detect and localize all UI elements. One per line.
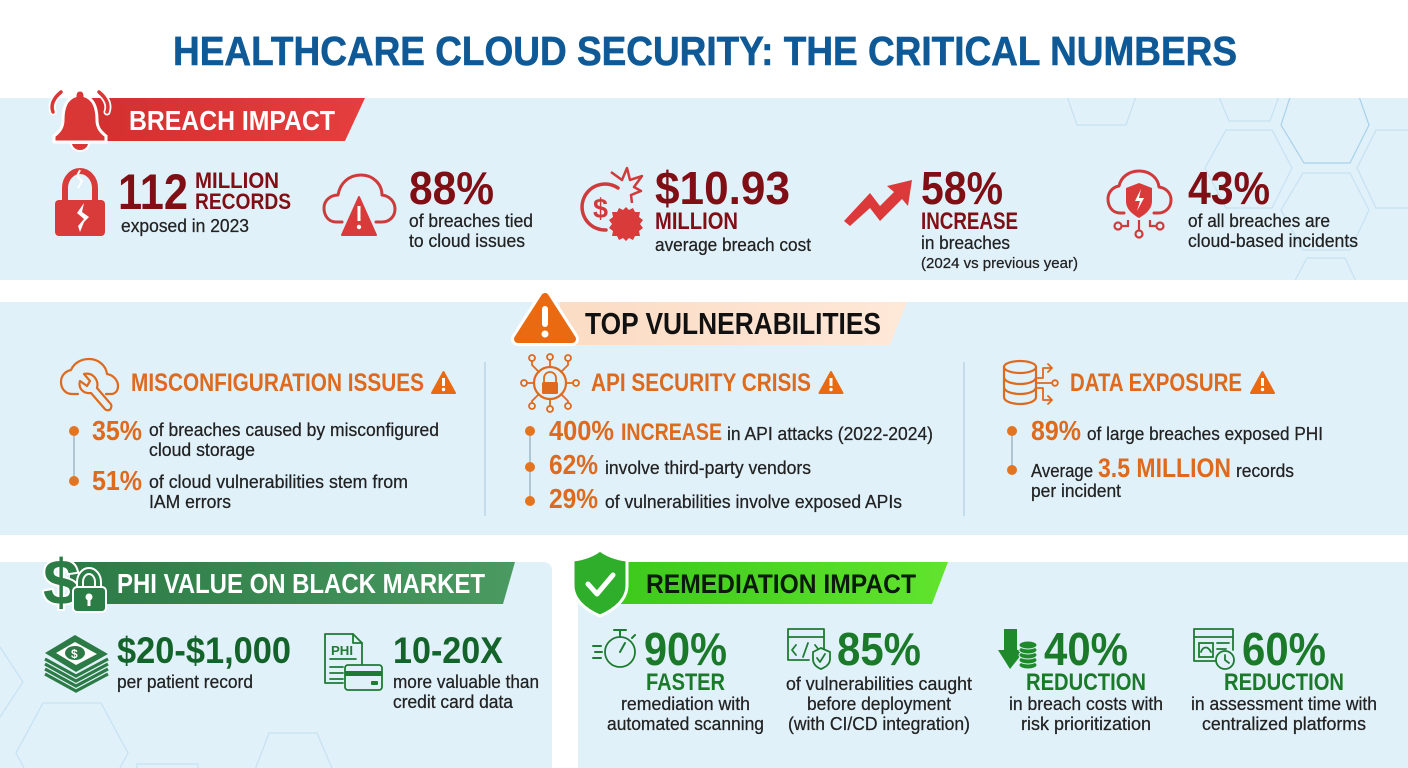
icon: PHI document and card: PHI: [331, 643, 353, 658]
stat: 60% reduction: REDUCTION: [1224, 669, 1344, 696]
column: data exposure: Average: [1031, 461, 1093, 481]
stat: 58% increase: (2024 vs previous year): [921, 255, 1078, 272]
panel: top vulnerabilities: [0, 297, 1408, 535]
stat: $10.93 million: MILLION: [655, 208, 738, 235]
stat: 58% increase: [844, 162, 1078, 272]
stat: 58% increase: INCREASE: [921, 208, 1018, 235]
banner: breach impact: BREACH IMPACT: [129, 105, 335, 136]
column: misconfiguration issues: of breaches caused by misconfigured: [149, 420, 439, 440]
column: API security crisis: API SECURITY CRISIS: [591, 369, 811, 397]
banner: remediation impact: REMEDIATION IMPACT: [646, 569, 916, 599]
icon: warning triangle: [518, 297, 572, 339]
column: misconfiguration issues: 35%: [92, 415, 142, 446]
column: data exposure: of large breaches exposed PHI: [1087, 424, 1323, 444]
stat: more valuable: more valuable than: [393, 672, 539, 692]
banner: breach impact: [80, 98, 365, 141]
stat: 40% reduction: REDUCTION: [1026, 669, 1146, 696]
stat: 85% caught: of vulnerabilities caught: [786, 674, 972, 694]
column: misconfiguration issues: IAM errors: [149, 492, 231, 512]
column: data exposure: [1004, 361, 1323, 501]
stat: 40% reduction: [998, 623, 1163, 734]
stat: 40% reduction: in breach costs with: [1009, 694, 1163, 714]
stat: price per record: per patient record: [117, 672, 253, 692]
stat: 112 million records: exposed in 2023: [121, 216, 249, 236]
stat: 40% reduction: risk prioritization: [1021, 714, 1151, 734]
banner: PHI value: [70, 562, 515, 604]
stat: 90% faster: automated scanning: [607, 714, 764, 734]
column: misconfiguration issues: 51%: [92, 465, 142, 496]
stat: 58% increase: in breaches: [921, 233, 1010, 253]
title: HEALTHCARE CLOUD SECURITY: THE CRITICAL NUMBERS: [173, 28, 1237, 74]
panel: breach impact: [0, 85, 1408, 290]
stat: 60% reduction: 60%: [1242, 623, 1326, 675]
stat: price per record: [45, 630, 291, 692]
stat: price per record: $20-$1,000: [117, 630, 291, 671]
column: API security crisis: [521, 354, 933, 514]
icon: stack of cash: [45, 635, 108, 691]
column: misconfiguration issues: [61, 359, 455, 512]
column: API security crisis: 62%: [549, 449, 598, 480]
stat: 40% reduction: 40%: [1044, 623, 1128, 675]
column: data exposure: DATA EXPOSURE: [1070, 369, 1242, 397]
stat: 43% cloud incidents: of all breaches are: [1188, 211, 1330, 231]
icon: cloud shield circuit: [1108, 171, 1171, 238]
icon: dashboard and clock: [1194, 629, 1234, 669]
stat: more valuable: 10-20X: [393, 630, 503, 671]
icon: rising arrow: [844, 180, 912, 226]
banner: top vulnerabilities: TOP VULNERABILITIES: [585, 306, 881, 341]
column: misconfiguration issues: cloud storage: [149, 440, 255, 460]
icon: code window and shield: [788, 629, 830, 669]
icon: broken padlock: [55, 170, 105, 236]
icon: database with arrows: [1004, 361, 1058, 404]
column: data exposure: 3.5 MILLION: [1098, 453, 1231, 483]
stat: 60% reduction: centralized platforms: [1202, 714, 1366, 734]
stat: 43% cloud incidents: cloud-based incidents: [1188, 231, 1358, 251]
stat: 112 million records: [55, 164, 291, 236]
icon: dollar and lock: [43, 546, 106, 618]
stat: 90% faster: FASTER: [646, 669, 725, 696]
icon: dollar and lock: $: [43, 546, 79, 618]
stat: 58% increase: 58%: [921, 162, 1003, 214]
stat: 60% reduction: in assessment time with: [1191, 694, 1377, 714]
column: misconfiguration issues: of cloud vulnerabilities stem from: [149, 472, 408, 492]
stat: 88% cloud: to cloud issues: [409, 231, 525, 251]
icon: small warning: [1251, 372, 1274, 393]
icon: dollar burst: $: [593, 193, 608, 224]
panel: remediation impact: [573, 550, 1408, 768]
column: API security crisis: involve third-party vendors: [605, 458, 811, 478]
stat: $10.93 million: average breach cost: [655, 235, 811, 255]
icon: small warning: [820, 372, 842, 393]
stat: more valuable: [325, 630, 539, 712]
stat: 88% cloud: of breaches tied: [409, 211, 533, 231]
icon: alarm bell: [52, 90, 108, 151]
column: data exposure: 89%: [1031, 415, 1081, 446]
column: API security crisis: 29%: [549, 483, 598, 514]
icon: small warning: [432, 372, 455, 393]
column: API security crisis: INCREASE: [621, 419, 722, 446]
stat: 43% cloud incidents: 43%: [1188, 162, 1270, 214]
stat: 90% faster: [593, 623, 764, 734]
icon: PHI document and card: [325, 634, 382, 690]
column: API security crisis: 400%: [549, 415, 614, 446]
stat: 85% caught: before deployment: [807, 694, 951, 714]
stat: 112 million records: 112: [118, 164, 188, 220]
stat: 88% cloud: 88%: [409, 162, 494, 214]
panel: PHI value on black market: [0, 546, 552, 768]
column: misconfiguration issues: MISCONFIGURATION ISSUES: [131, 369, 424, 397]
icon: stack of cash: $: [71, 647, 78, 661]
column: API security crisis: of vulnerabilities involve exposed APIs: [605, 492, 902, 512]
stat: 90% faster: remediation with: [621, 694, 750, 714]
stat: 85% caught: [786, 623, 972, 734]
stat: 112 million records: RECORDS: [195, 189, 291, 214]
banner: remediation impact: [610, 562, 948, 604]
stat: 112 million records: MILLION: [195, 168, 279, 193]
icon: stopwatch: [593, 630, 635, 667]
stat: 90% faster: 90%: [644, 623, 727, 675]
stat: 85% caught: 85%: [837, 623, 921, 675]
stat: $10.93 million: $10.93: [655, 162, 790, 214]
icon: cloud wrench: [61, 359, 118, 410]
column: API security crisis: in API attacks (2022-2024): [727, 424, 933, 444]
stat: 85% caught: (with CI/CD integration): [788, 714, 970, 734]
banner: PHI value: PHI VALUE ON BLACK MARKET: [117, 568, 485, 599]
stat: 88% cloud: [324, 162, 533, 251]
column: data exposure: records: [1236, 461, 1294, 481]
icon: check shield: [573, 550, 627, 616]
column: data exposure: per incident: [1031, 481, 1121, 501]
stat: 43% cloud incidents: [1108, 162, 1358, 251]
stat: $10.93 million: [582, 162, 811, 255]
icon: down arrow and coins: [998, 629, 1037, 669]
icon: dollar burst: [582, 168, 643, 241]
icon: cloud warning: [324, 175, 395, 235]
icon: API lock hub: [521, 354, 579, 412]
stat: more valuable: credit card data: [393, 692, 514, 712]
stat: 60% reduction: [1191, 623, 1377, 734]
